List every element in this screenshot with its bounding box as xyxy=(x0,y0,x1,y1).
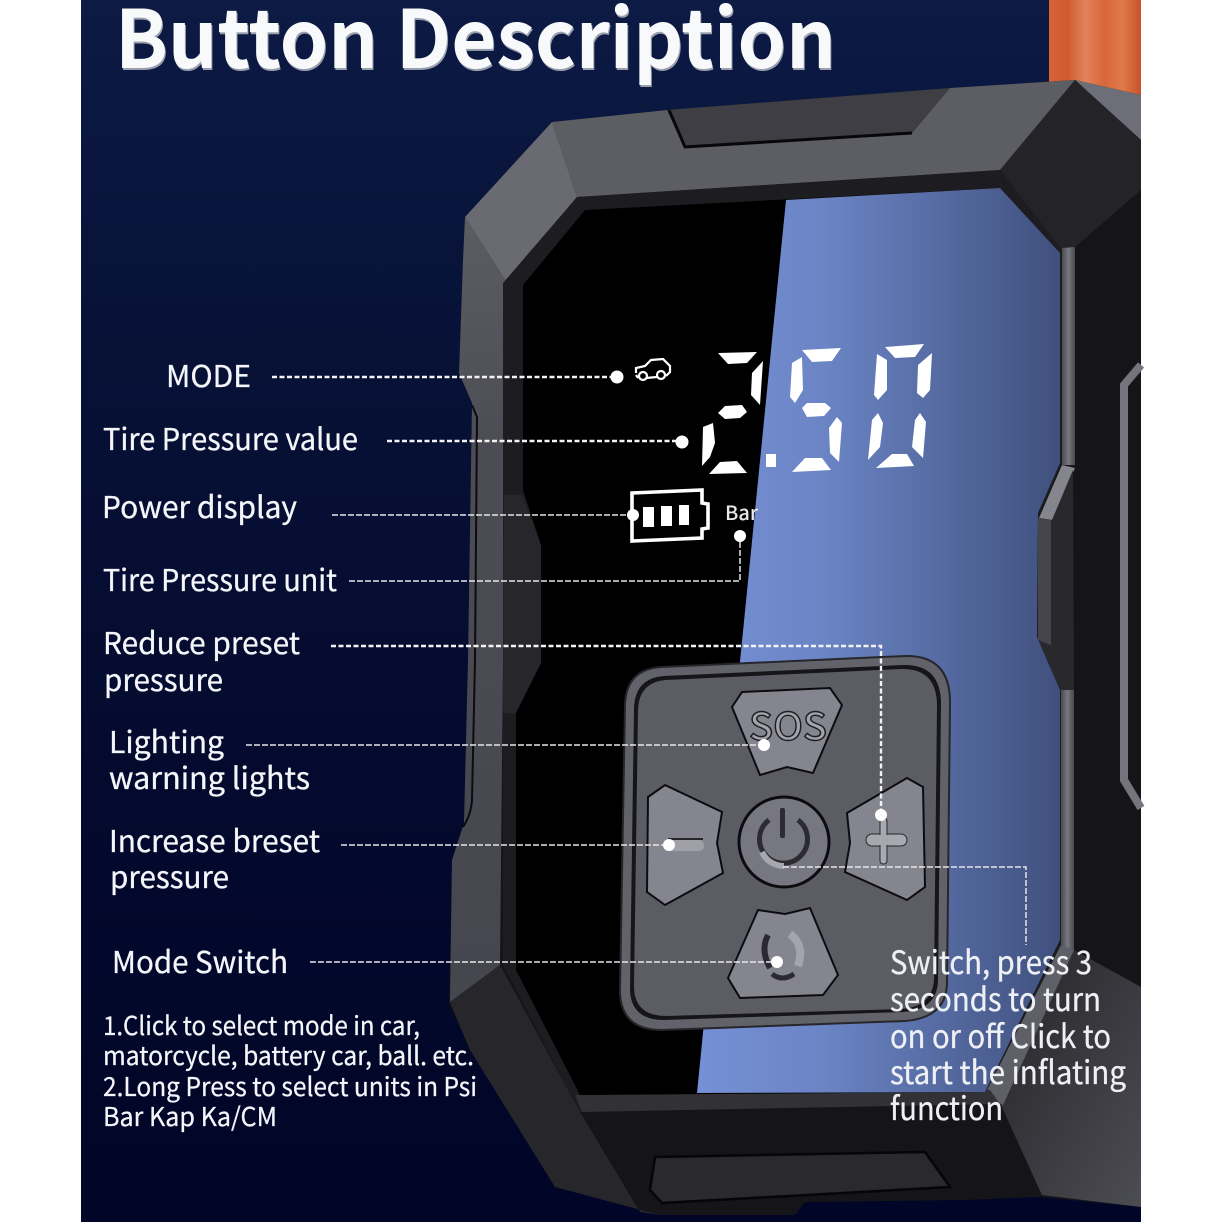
left face xyxy=(450,217,507,1002)
right upper strip xyxy=(1062,247,1075,465)
bottom right chamfer line xyxy=(985,945,1074,1105)
callout: power switch: start the inflating xyxy=(890,1048,1126,1094)
orange nozzle top right xyxy=(1049,0,1141,96)
top face xyxy=(552,80,1075,197)
callout: power switch: function xyxy=(890,1084,1003,1130)
SOS button: SOS xyxy=(749,696,827,751)
minus button xyxy=(647,785,723,905)
bottom left face xyxy=(450,965,660,1215)
mode switch instructions: Bar Kap Ka/CM xyxy=(103,1097,277,1134)
bottom right face xyxy=(1000,950,1141,1207)
device body xyxy=(449,80,1141,1215)
SOS button xyxy=(732,688,842,775)
callout: power display: Power display xyxy=(102,483,297,527)
mode switch instructions: 1.Click to select mode in car, xyxy=(103,1006,420,1043)
plus button xyxy=(845,778,925,900)
mode button xyxy=(728,908,838,998)
icon: battery xyxy=(632,490,708,541)
bezel left step xyxy=(503,495,541,713)
right groove strip xyxy=(1124,365,1141,808)
mode switch instructions: 2.Long Press to select units in Psi xyxy=(103,1067,477,1104)
notch shadow xyxy=(669,110,912,147)
power button xyxy=(739,797,829,887)
callout: MODE xyxy=(166,352,624,396)
callout: power switch: on or off Click to xyxy=(890,1012,1111,1058)
digit 0 xyxy=(868,344,932,468)
callout: reduce preset pressure: pressure xyxy=(104,656,223,700)
digit 2 xyxy=(702,352,763,474)
callout: power switch: Switch, press 3 xyxy=(890,938,1092,984)
callout: lighting warning lights: Lighting xyxy=(109,718,224,762)
right lower strip xyxy=(1061,690,1074,955)
callout: increase preset pressure: pressure xyxy=(110,853,229,897)
callout: lighting warning lights xyxy=(109,718,770,798)
right step strip xyxy=(1038,518,1051,645)
right chamfer highlight xyxy=(1039,465,1075,520)
callout: power switch xyxy=(783,867,1126,1130)
unit label: Bar xyxy=(725,497,759,526)
panel outer ring xyxy=(620,656,950,1030)
body silhouette xyxy=(449,80,1141,1215)
icon: car xyxy=(636,359,670,380)
control panel xyxy=(620,656,950,1030)
callout: reduce preset pressure: Reduce preset xyxy=(103,619,300,663)
callout: MODE: MODE xyxy=(166,352,251,396)
top right chamfer dark xyxy=(1000,80,1141,250)
top right chamfer light xyxy=(1075,80,1141,140)
mode switch instructions: matorcycle, battery car, ball. etc. xyxy=(103,1036,474,1073)
screen black base xyxy=(516,188,1060,1095)
screen blue backlight xyxy=(697,188,1060,1093)
callout: increase preset pressure: Increase breset xyxy=(109,817,320,861)
callout: reduce preset pressure xyxy=(103,619,887,821)
callout: mode switch: Mode Switch xyxy=(112,938,288,982)
pressure digits 2.50 xyxy=(702,344,932,474)
panel face xyxy=(634,669,937,1016)
digit 5 xyxy=(790,348,842,472)
right step block xyxy=(1038,470,1074,690)
callout: lighting warning lights: warning lights xyxy=(109,754,310,798)
screen bezel xyxy=(503,170,1062,1112)
callout: tire pressure unit: Tire Pressure unit xyxy=(103,556,337,600)
top left chamfer xyxy=(465,122,577,283)
mode switch instructions xyxy=(103,1006,477,1134)
callout: tire pressure unit xyxy=(103,530,746,600)
left groove line xyxy=(463,405,477,827)
callout: power display xyxy=(102,483,639,527)
callout: power switch: seconds to turn xyxy=(890,975,1101,1021)
screen xyxy=(516,188,1060,1095)
decimal point xyxy=(766,454,776,467)
bottom notch xyxy=(650,1152,950,1203)
top notch xyxy=(667,88,950,147)
bottom bezel strip xyxy=(575,1090,1000,1112)
callout: tire pressure value: Tire Pressure value xyxy=(103,415,358,459)
callout: increase preset pressure xyxy=(109,817,675,897)
callout: mode switch xyxy=(112,938,783,982)
panel groove xyxy=(630,665,941,1020)
callout: tire pressure value xyxy=(103,415,688,459)
